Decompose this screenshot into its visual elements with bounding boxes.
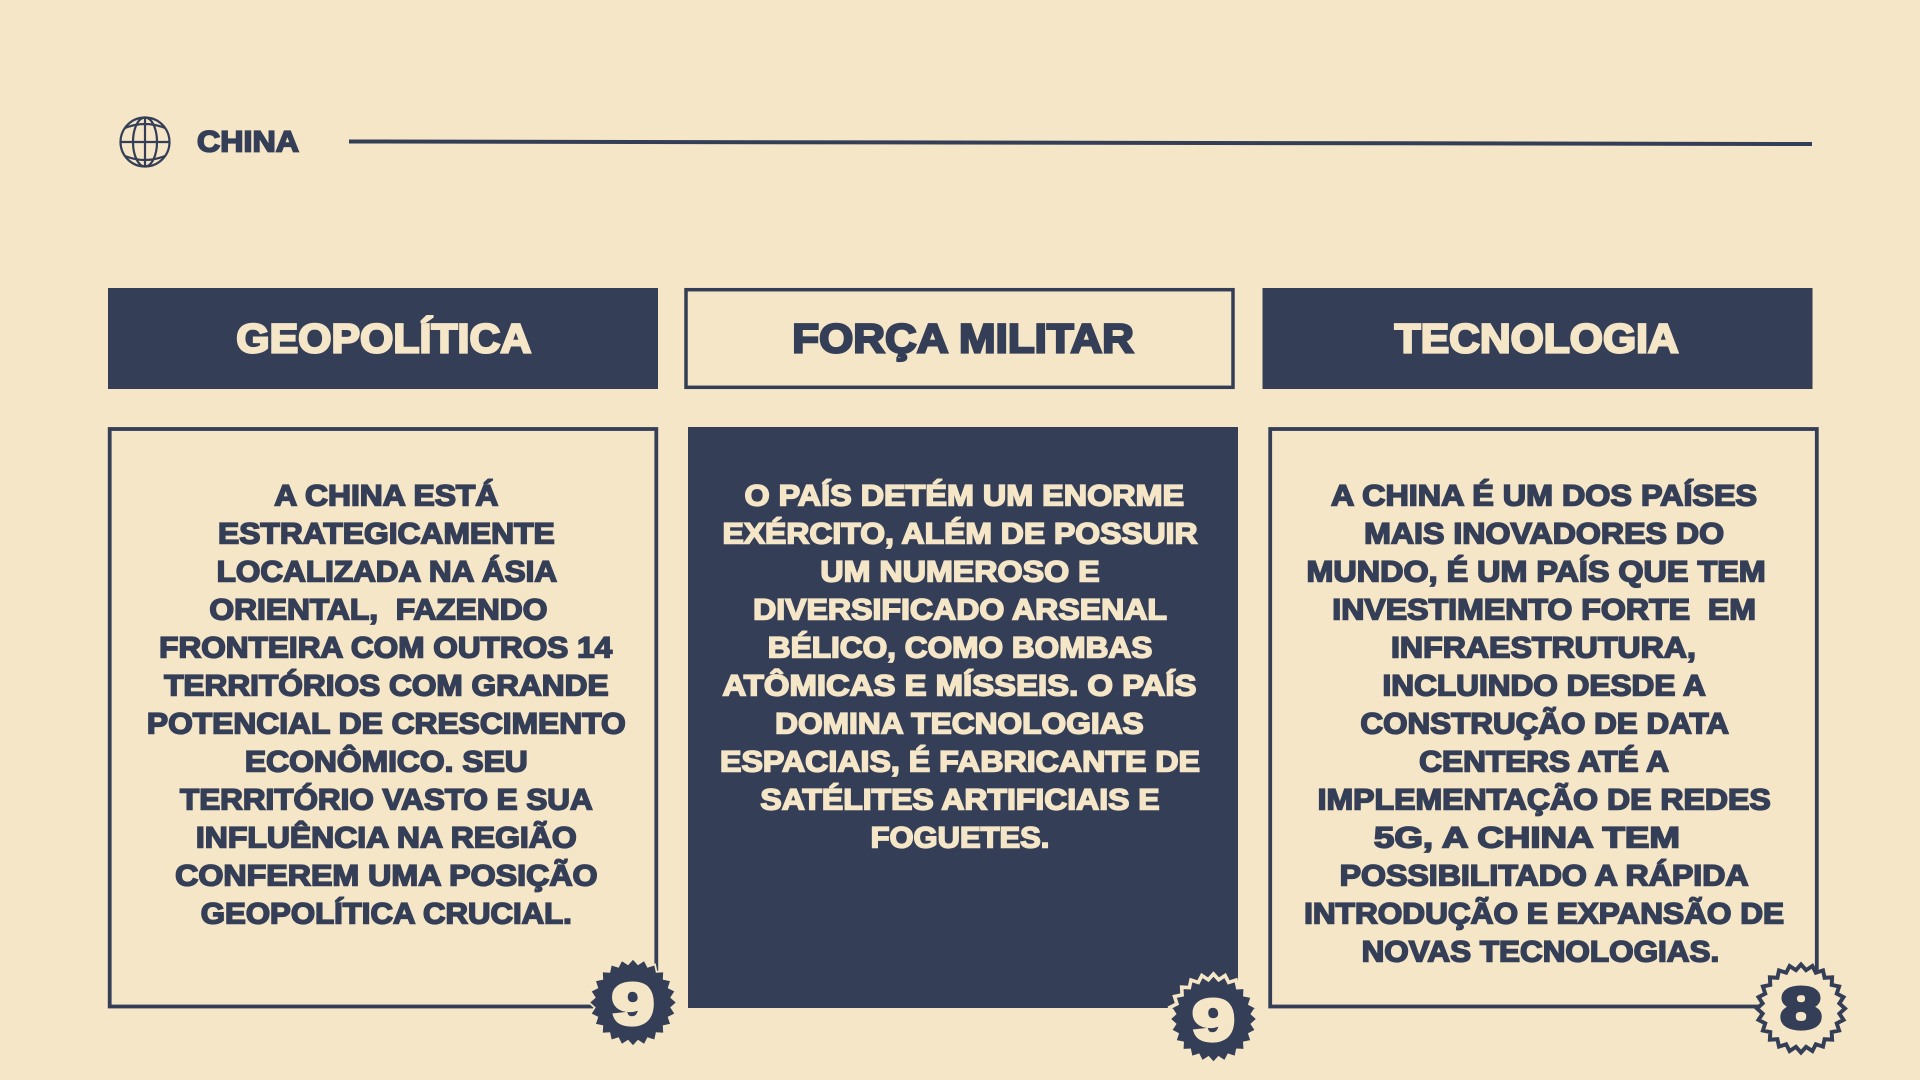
text: geopolítica description <box>147 478 626 930</box>
badge: score 9 força militar <box>1168 974 1258 1064</box>
panel: força militar body <box>688 427 1238 1008</box>
text: tecnologia description: MAIS INOVADORES DO <box>1364 518 1724 550</box>
text: força militar description: DIVERSIFICADO ARSENAL <box>753 594 1167 626</box>
heading: tecnologia: TECNOLOGIA <box>1395 316 1679 362</box>
text: geopolítica description: INFLUÊNCIA NA REGIÃO <box>196 820 577 854</box>
panel: tecnologia header <box>1262 288 1812 389</box>
panel: geopolítica header <box>108 288 658 389</box>
text: geopolítica description: GEOPOLÍTICA CRUCIAL. <box>201 896 572 930</box>
panel: tecnologia body <box>1270 429 1817 1006</box>
text: tecnologia description: NOVAS TECNOLOGIAS. <box>1362 936 1719 968</box>
text: geopolítica description: TERRITÓRIOS COM GRANDE <box>164 668 609 702</box>
text: tecnologia description <box>1304 478 1784 968</box>
text: força militar description: FOGUETES. <box>871 822 1049 854</box>
text: geopolítica description: FRONTEIRA COM OUTROS 14 <box>159 632 613 664</box>
text: tecnologia description: A CHINA É UM DOS PAÍSES <box>1331 478 1757 512</box>
heading: força militar: FORÇA MILITAR <box>792 316 1134 362</box>
panel: força militar header <box>686 290 1233 387</box>
icon: globe <box>120 118 170 166</box>
panel: geopolítica body <box>110 429 656 1006</box>
text: geopolítica description: POTENCIAL DE CRESCIMENTO <box>147 708 626 740</box>
text: força militar description <box>720 478 1200 854</box>
score number: 8 <box>1780 976 1822 1041</box>
title: CHINA <box>197 126 299 158</box>
text: tecnologia description: POSSIBILITADO A RÁPIDA <box>1340 858 1749 892</box>
text: geopolítica description: ECONÔMICO. SEU <box>245 744 528 778</box>
text: tecnologia description: 5G, A CHINA TEM <box>1374 822 1680 854</box>
text: geopolítica description: TERRITÓRIO VASTO E SUA <box>180 782 593 816</box>
title rule <box>349 142 1812 144</box>
badge: score 9 geopolítica <box>589 958 677 1046</box>
text: força militar description: O PAÍS DETÉM UM ENORME <box>744 478 1184 512</box>
text: força militar description: UM NUMEROSO E <box>820 556 1100 588</box>
text: força militar description: BÉLICO, COMO BOMBAS <box>768 630 1152 664</box>
text: força militar description: SATÉLITES ARTIFICIAIS E <box>760 782 1160 816</box>
text: geopolítica description: ESTRATEGICAMENTE <box>218 518 555 550</box>
score number: 9 <box>1192 988 1234 1053</box>
text: força militar description: ESPACIAIS, É FABRICANTE DE <box>720 744 1200 778</box>
text: geopolítica description: CONFEREM UMA POSIÇÃO <box>175 858 598 892</box>
text: tecnologia description: INCLUINDO DESDE A <box>1382 670 1706 702</box>
text: tecnologia description: MUNDO, É UM PAÍS QUE TEM <box>1306 554 1766 588</box>
text: tecnologia description: CENTERS ATÉ A <box>1419 744 1669 778</box>
score number: 9 <box>612 972 654 1037</box>
text: força militar description: DOMINA TECNOLOGIAS <box>775 708 1144 740</box>
text: tecnologia description: CONSTRUÇÃO DE DATA <box>1360 706 1729 740</box>
heading: geopolítica: GEOPOLÍTICA <box>236 316 531 362</box>
text: geopolítica description: LOCALIZADA NA ÁSIA <box>217 554 557 588</box>
badge: score 8 tecnologia <box>1757 964 1845 1052</box>
text: tecnologia description: INTRODUÇÃO E EXPANSÃO DE <box>1304 896 1784 930</box>
text: força militar description: ATÔMICAS E MÍSSEIS. O PAÍS <box>722 668 1196 702</box>
text: geopolítica description: A CHINA ESTÁ <box>274 478 498 512</box>
text: força militar description: EXÉRCITO, ALÉM DE POSSUIR <box>722 516 1198 550</box>
text: tecnologia description: IMPLEMENTAÇÃO DE REDES <box>1318 782 1771 816</box>
text: tecnologia description: INFRAESTRUTURA, <box>1391 632 1696 664</box>
text: geopolítica description: ORIENTAL, FAZENDO <box>209 594 547 626</box>
text: tecnologia description: INVESTIMENTO FORTE EM <box>1332 594 1756 626</box>
